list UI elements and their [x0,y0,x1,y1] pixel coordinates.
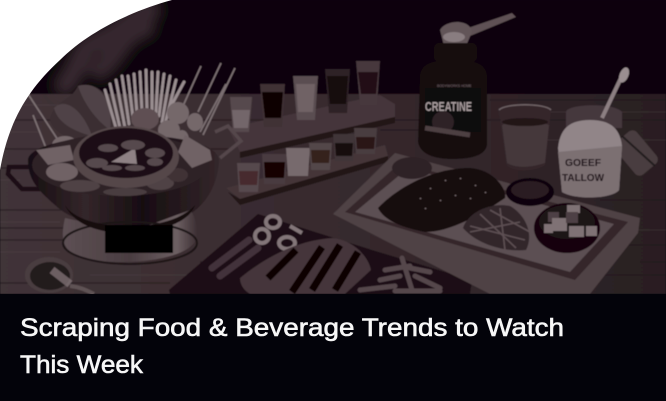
serving board: lower drinks flight [226,145,388,205]
water glass [499,105,551,170]
jar lid on table [612,128,660,178]
skewers [28,63,235,148]
tallow jar with spoon [558,66,631,197]
shot glasses: top row [230,61,380,132]
carrot sticks [212,240,258,276]
slate board with brisket, vegetables and fries [169,214,472,294]
wooden table [0,94,666,294]
leafy greens [50,85,112,142]
title: Scraping Food & Beverage Trends to Watch [20,314,564,342]
side handles [215,126,241,158]
ribs [378,157,505,232]
jar body [418,60,487,159]
serving board: top drinks flight [228,95,395,158]
jar label text: BODYWORKS HOME [437,84,472,88]
food around the inner pot [32,134,208,196]
enoki mushrooms [105,70,184,128]
scoop [468,13,516,36]
pot body [28,135,219,228]
spoon [25,257,94,294]
shot glasses: lower row [237,128,377,192]
creatine jar with scoop: CREATINE [425,99,472,114]
sauce cup [506,178,554,206]
title band [0,294,666,401]
fish balls [52,102,203,154]
title: This Week [20,351,144,379]
tallow label text: GOEEF [565,157,602,169]
pot stand [63,210,197,262]
dark backdrop [0,0,666,95]
wooden cutting board [333,153,640,294]
onion rings [255,216,302,249]
steam [65,10,150,85]
creatine jar with scoop [418,13,516,159]
brisket slices [240,238,371,294]
tallow jar with spoon: TALLOW [562,172,604,184]
photo: food and beverage table scene [0,0,666,294]
inner pot [73,126,179,188]
title [20,314,564,379]
jar lid [434,43,477,62]
white rounded corner [0,0,172,170]
pulled meat [463,205,530,250]
hot pot with skewers and vegetables [8,63,241,264]
spoon in jar [602,78,621,118]
fries [360,258,440,291]
bowl with cubes [534,203,600,253]
lotus slice [131,108,159,130]
